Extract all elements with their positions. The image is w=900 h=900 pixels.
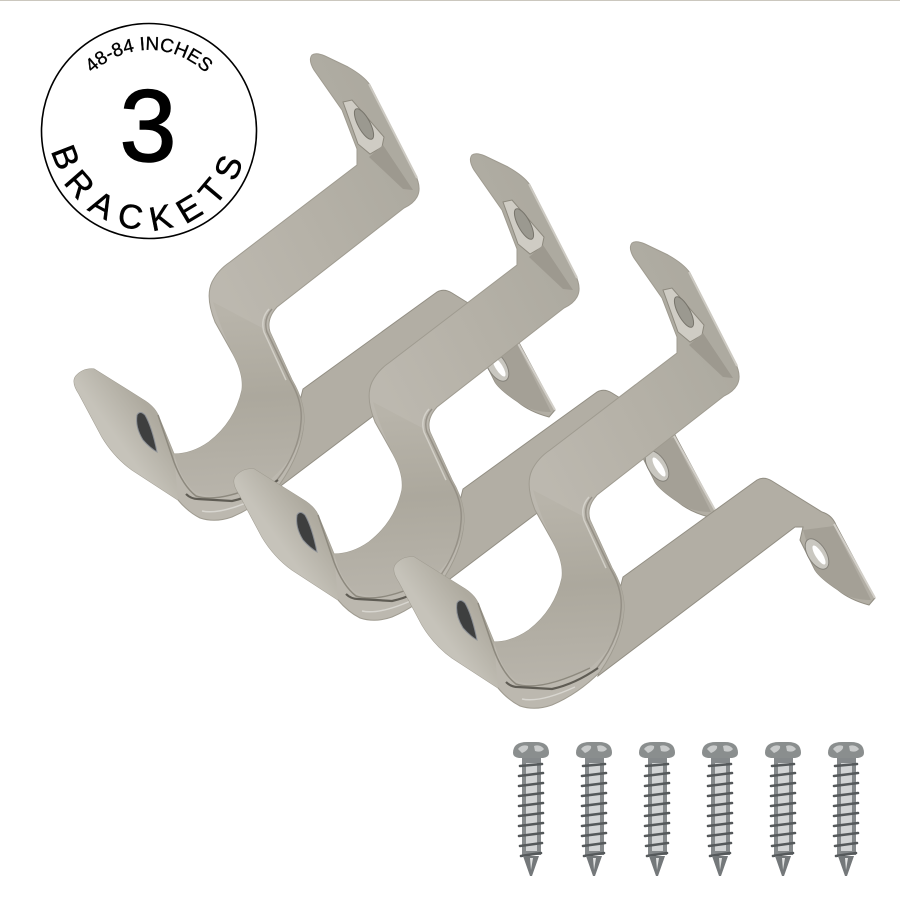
top edge line	[0, 0, 900, 1]
badge: 3 brackets, 48-84 inches	[40, 22, 258, 240]
photo: six mounting screws	[513, 742, 864, 876]
badge bottom text: BRACKETS	[51, 144, 242, 232]
badge number: 3	[120, 69, 176, 183]
photo: front bracket	[394, 242, 875, 708]
photo: back bracket	[74, 54, 555, 520]
photo: middle bracket	[234, 154, 715, 620]
badge top text: 48-84 INCHES	[88, 36, 212, 72]
